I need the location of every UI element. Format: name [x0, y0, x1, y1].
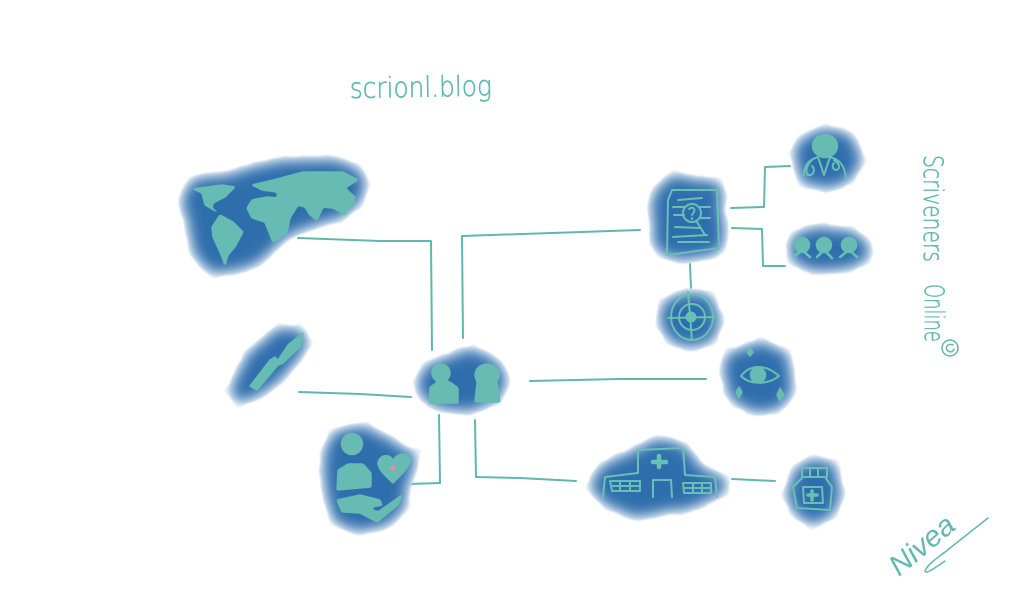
vertical credit: Scriveners Online	[917, 155, 958, 356]
icon: eye with sparkles	[736, 348, 784, 401]
vertical credit: Scriveners Online: Scriveners	[917, 155, 948, 262]
connector lines	[298, 166, 790, 484]
icon: bottle	[793, 468, 832, 510]
panel: doctor	[790, 125, 865, 193]
panel: document	[648, 172, 728, 263]
panel: eye	[719, 339, 798, 415]
panel: world map	[178, 157, 370, 278]
icon: hospital building	[603, 448, 717, 497]
panel: group	[785, 224, 873, 275]
icon: heart dot	[390, 465, 396, 471]
icon: person and hand	[337, 434, 402, 522]
icon: scalpel	[250, 333, 303, 390]
title: scrionl.blog: scrionl.blog	[350, 70, 492, 105]
icon: two people	[429, 364, 500, 403]
icon: continents	[193, 172, 358, 265]
panel: medicine bottle	[783, 455, 845, 528]
panel: central people	[413, 345, 510, 415]
icon: three people	[794, 238, 857, 258]
panel: patient care	[320, 422, 420, 535]
signature: Nivea: Nivea	[883, 509, 962, 582]
panel: knife	[226, 325, 313, 407]
icon: report with magnifier	[667, 190, 719, 255]
panel: hospital	[586, 436, 730, 520]
icon: heart	[378, 454, 410, 483]
icon: doctor	[804, 134, 846, 179]
panel: target	[656, 288, 725, 353]
vertical credit: Scriveners Online: Online	[918, 284, 949, 342]
icon: crosshair	[668, 292, 715, 340]
